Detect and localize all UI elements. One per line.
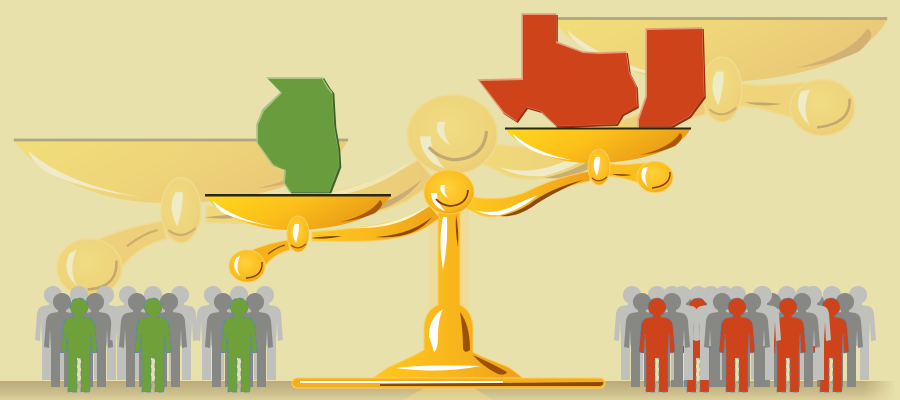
indiana state shape [637,27,706,128]
pillar highlights [395,215,507,375]
main scale [205,128,691,388]
ghost scale in background [14,18,887,297]
scale pillar [373,212,523,378]
people group right: red [614,286,876,392]
texas state shape [477,13,639,128]
scale base plate [292,378,605,388]
beam shading [205,128,691,278]
crowd 2 [110,286,198,392]
crowd 1 [614,286,700,392]
people group left: green [35,286,283,392]
scale beam, pans and knobs [205,128,691,282]
crowd 3 [195,286,283,392]
ghost pillar behind scale [403,210,493,400]
crowd 4 [744,286,831,392]
illinois state shape [256,77,341,193]
crowd 5 [787,286,876,392]
crowd 1 [35,286,123,392]
floor band [0,381,900,400]
crowd 2 [654,286,742,392]
crowd 3 [693,286,781,392]
